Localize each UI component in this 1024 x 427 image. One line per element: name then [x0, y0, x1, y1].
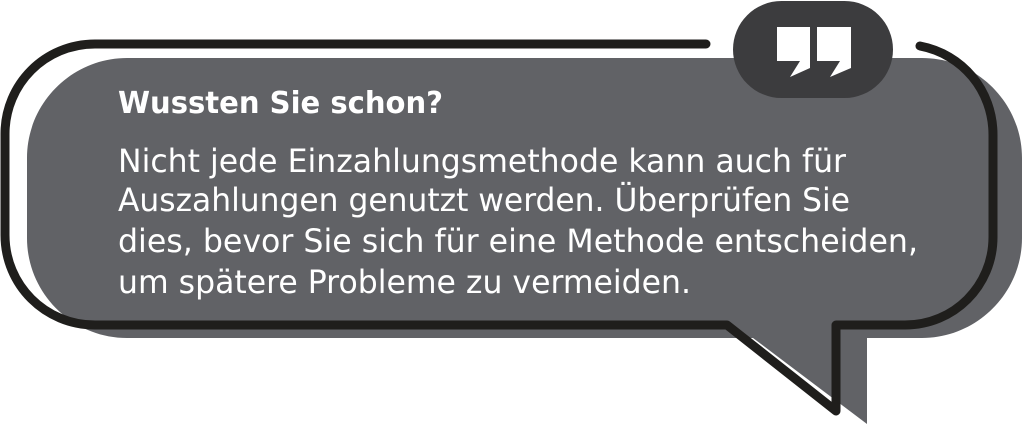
text block: body copy: um spätere Probleme zu vermeiden. [118, 263, 691, 301]
text block: body copy: Auszahlungen genutzt werden. Überprüfen Sie [118, 181, 850, 219]
text block: body copy: Nicht jede Einzahlungsmethode kann auch für [118, 142, 847, 180]
text block: body copy: dies, bevor Sie sich für eine Methode entscheiden, [118, 222, 918, 260]
badge: dark pill with quotation marks [733, 1, 893, 98]
icon: quotation marks [777, 27, 851, 77]
heading: Wussten Sie schon? [118, 86, 443, 121]
text block: body copy [118, 142, 918, 301]
